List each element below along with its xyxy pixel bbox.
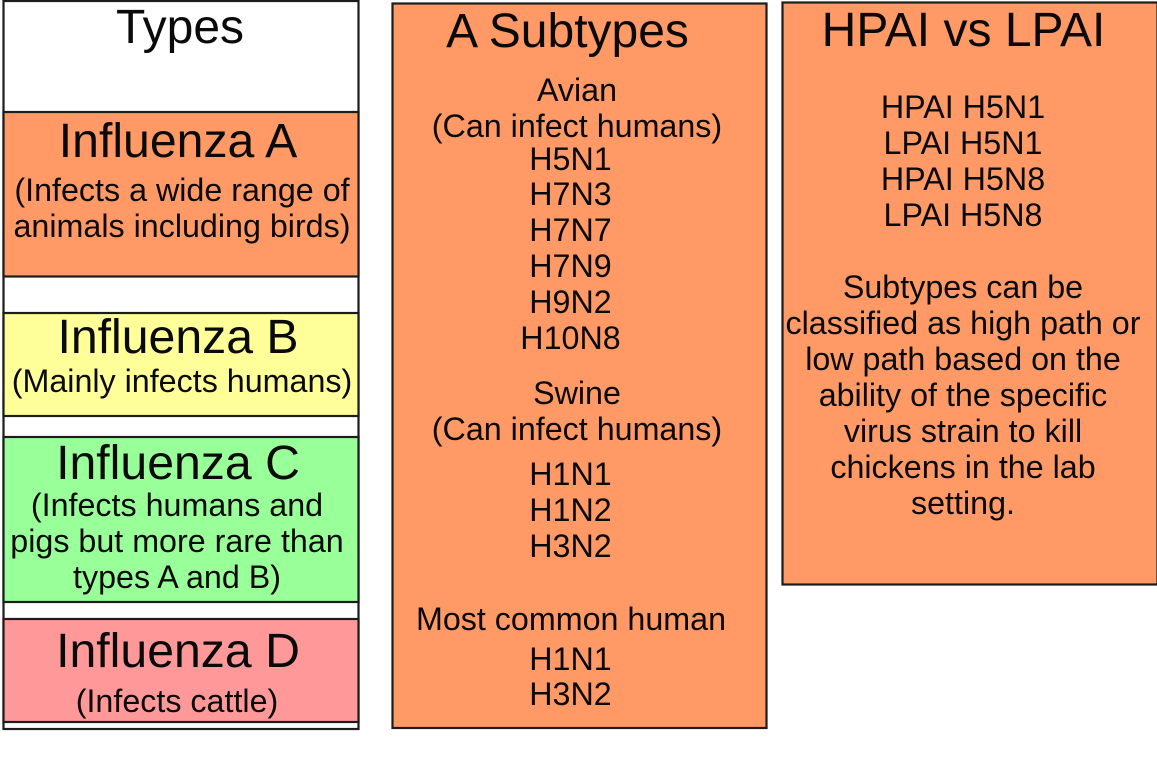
panel: Influenza A: animals including birds)	[14, 208, 350, 244]
types column background	[4, 1, 358, 729]
list: most common human subtypes: H3N2	[529, 676, 612, 712]
panel: Influenza C	[4, 436, 358, 602]
list: strain classifications: LPAI H5N1	[884, 125, 1042, 161]
HPAI vs LPAI background	[782, 2, 1157, 584]
panel: Influenza A: Influenza A	[59, 114, 298, 168]
list: swine subtypes: (Can infect humans)	[432, 411, 722, 447]
panel: Influenza C: types A and B)	[73, 559, 281, 595]
list: strain classifications: LPAI H5N8	[884, 197, 1042, 233]
list: strain classifications: HPAI H5N8	[881, 161, 1045, 197]
panel: Influenza B: Influenza B	[57, 310, 299, 364]
text block: classification explanation: Subtypes can be	[843, 269, 1083, 305]
list: avian subtypes: Avian	[537, 72, 617, 108]
panel: Influenza A: (Infects a wide range of	[14, 172, 350, 208]
list: swine subtypes: Swine	[533, 375, 621, 411]
list: strain classifications	[881, 89, 1045, 233]
text block: classification explanation	[786, 269, 1141, 521]
panel: Influenza D: Influenza D	[56, 624, 300, 678]
list: avian subtypes: (Can infect humans)	[432, 108, 722, 144]
list: avian subtypes: H9N2	[529, 284, 612, 320]
text block: classification explanation: ability of the specific	[819, 377, 1107, 413]
list: most common human subtypes: Most common human	[416, 601, 726, 637]
panel: Influenza C: (Infects humans and	[31, 487, 323, 523]
panel: Influenza D	[4, 619, 358, 722]
list: avian subtypes	[432, 72, 722, 356]
panel: Influenza C: Influenza C	[56, 436, 300, 490]
heading: Types: Types	[116, 1, 244, 54]
list: most common human subtypes: H1N1	[529, 641, 612, 677]
panel: Influenza C: pigs but more rare than	[10, 523, 344, 559]
heading: HPAI vs LPAI: HPAI vs LPAI	[822, 4, 1105, 57]
text block: classification explanation: classified as high path or	[786, 305, 1141, 341]
list: avian subtypes: H7N3	[529, 176, 612, 212]
panel: types column	[4, 1, 358, 729]
panel: A subtypes	[392, 4, 766, 728]
panel: Influenza D: (Infects cattle)	[76, 683, 278, 719]
list: avian subtypes: H10N8	[520, 320, 621, 356]
panel: HPAI vs LPAI	[782, 2, 1157, 584]
list: most common human subtypes	[416, 601, 726, 712]
list: avian subtypes: H7N9	[529, 248, 612, 284]
panel: Influenza A	[4, 112, 358, 276]
text block: classification explanation: virus strain to kill	[844, 413, 1082, 449]
list: strain classifications: HPAI H5N1	[881, 89, 1045, 125]
list: swine subtypes: H3N2	[529, 528, 612, 564]
list: avian subtypes: H7N7	[529, 212, 612, 248]
list: swine subtypes	[432, 375, 722, 564]
text block: classification explanation: chickens in the lab	[830, 449, 1096, 485]
list: swine subtypes: H1N2	[529, 492, 612, 528]
heading: A Subtypes: A Subtypes	[446, 5, 689, 58]
A subtypes background	[392, 4, 766, 728]
panel: Influenza B	[4, 310, 358, 416]
list: avian subtypes: H5N1	[529, 141, 612, 177]
list: swine subtypes: H1N1	[529, 456, 612, 492]
panel: Influenza B: (Mainly infects humans)	[12, 363, 352, 399]
text block: classification explanation: setting.	[911, 485, 1015, 521]
text block: classification explanation: low path based on the	[805, 341, 1121, 377]
